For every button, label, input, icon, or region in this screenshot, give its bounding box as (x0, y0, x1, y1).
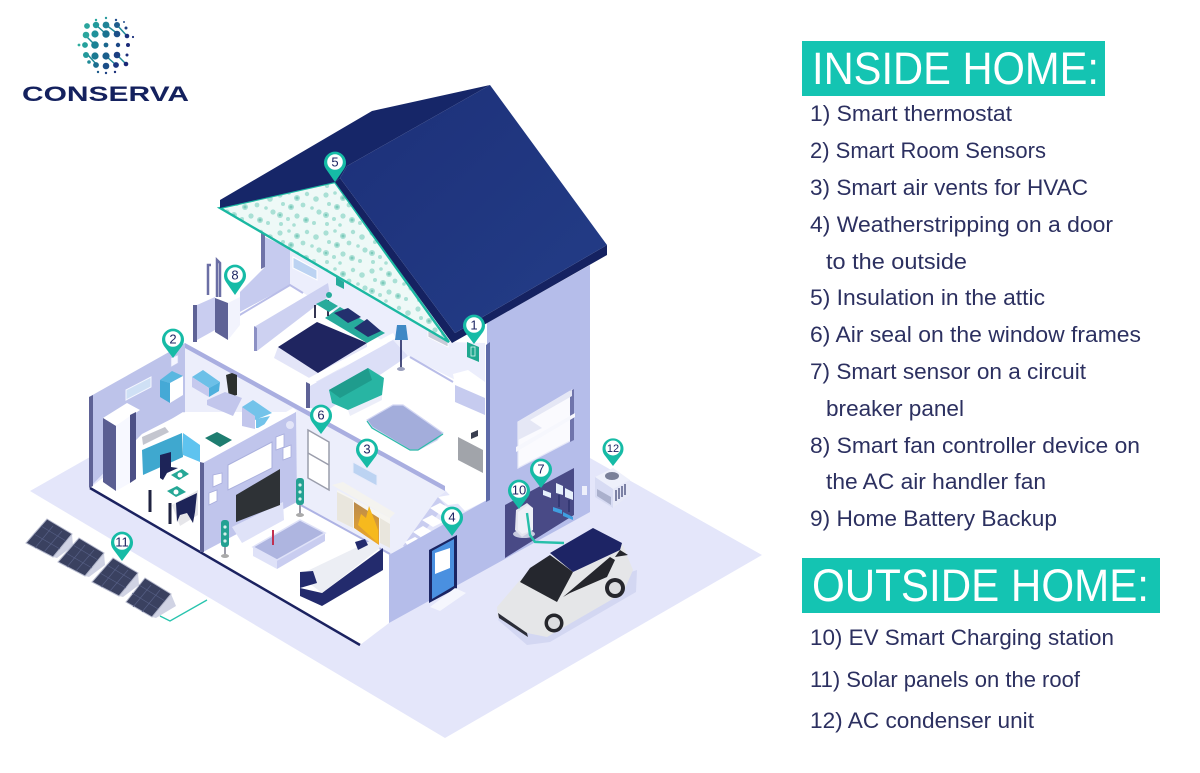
pin 2: 2 (169, 332, 177, 347)
chair front (176, 493, 197, 523)
lower back wall (185, 345, 445, 553)
bedroom front partition (305, 333, 408, 410)
air handler room (193, 260, 240, 342)
wall clock (286, 421, 294, 429)
pin 4 (441, 507, 463, 536)
item 8: the AC air handler fan (826, 469, 1046, 494)
roof (220, 85, 607, 343)
solar cable (160, 600, 207, 621)
logo: Conserva (22, 17, 189, 106)
speaker left (221, 520, 229, 558)
side cabinet (458, 428, 487, 473)
smart thermostat (467, 342, 479, 362)
coffee table (253, 520, 325, 569)
sink (142, 427, 169, 445)
blue box (242, 400, 272, 429)
air vent (353, 462, 377, 486)
pin 10: 10 (512, 483, 526, 498)
item 8 (810, 433, 1140, 494)
pin 3 (356, 439, 378, 468)
pin 1: 1 (470, 318, 478, 333)
stripe: lower back wall top (185, 343, 445, 491)
panel: outside home list (802, 558, 1160, 733)
item 7 (810, 359, 1086, 421)
breaker boxes (543, 483, 573, 520)
solar panel 2 (58, 538, 105, 577)
electric car (497, 528, 637, 645)
partition kitchen living (200, 408, 297, 552)
charging cable (527, 513, 564, 543)
TV wall (209, 421, 294, 543)
floor lamp (395, 325, 408, 371)
logo wordmark: CONSERVA (22, 83, 189, 106)
insulation triangle (220, 182, 449, 342)
pin 11 (111, 532, 133, 561)
television (236, 469, 280, 522)
pin 2 (162, 329, 184, 358)
panel: house (89, 85, 637, 645)
pin 5: 5 (331, 155, 339, 170)
item 4 (810, 212, 1113, 274)
tall speaker (226, 373, 237, 397)
solar panel 4 (126, 578, 176, 618)
item 9: 9) Home Battery Backup (810, 506, 1057, 531)
kitchen and living floor (90, 412, 390, 645)
upper back wall (290, 248, 485, 395)
ground plane (30, 457, 762, 738)
fireplace (332, 482, 395, 548)
kitchen (103, 355, 272, 526)
upper baseboards (228, 285, 453, 382)
window: exterior (516, 389, 575, 468)
smart room sensor (171, 355, 178, 367)
wall vent kitchen (126, 377, 151, 400)
upper window (293, 257, 317, 280)
icon: dotted globe (78, 17, 134, 74)
pin 5 (324, 152, 346, 182)
shelf unit (207, 392, 242, 416)
pin 7: 7 (537, 462, 545, 477)
rug (367, 405, 443, 450)
item 4: 4) Weatherstripping on a door (810, 212, 1113, 237)
fire (354, 502, 379, 545)
panel: solar array (26, 519, 207, 621)
item 3: 3) Smart air vents for HVAC (810, 175, 1088, 200)
dining table (148, 469, 200, 526)
item 11: 11) Solar panels on the roof (810, 667, 1081, 692)
cooktop (205, 432, 232, 447)
upper left wall (240, 237, 290, 312)
upper room partitions (254, 283, 330, 351)
pin 3: 3 (363, 442, 371, 457)
pin 6 (310, 405, 332, 434)
item 7: breaker panel (826, 396, 964, 421)
speaker right (296, 478, 304, 517)
upper floor (185, 285, 487, 511)
item 4: to the outside (826, 249, 967, 274)
counter top (142, 412, 235, 453)
TV stand (232, 502, 284, 543)
pin 8 (224, 265, 246, 295)
AC condenser (595, 468, 630, 508)
picture (228, 442, 272, 490)
chair back (160, 452, 178, 480)
wall frames (209, 434, 291, 505)
item 1: 1) Smart thermostat (810, 101, 1012, 126)
wall cabinet (160, 371, 183, 403)
cabinets (142, 433, 200, 475)
dresser (453, 370, 485, 415)
pin 4: 4 (448, 510, 456, 525)
duct pipes (208, 260, 220, 297)
item 10: 10) EV Smart Charging station (810, 625, 1114, 650)
item 8: 8) Smart fan controller device on (810, 433, 1140, 458)
door (429, 535, 466, 611)
pin 12: 12 (607, 443, 619, 455)
bed (274, 292, 385, 383)
front wall and right wall (389, 265, 590, 623)
wall socket (582, 486, 587, 495)
pin 8: 8 (231, 268, 239, 283)
solar panel 3 (92, 558, 139, 597)
item 5: 5) Insulation in the attic (810, 285, 1045, 310)
pin 12 (602, 438, 624, 466)
upper wall switch (336, 277, 344, 289)
pin 10 (508, 480, 530, 509)
item 7: 7) Smart sensor on a circuit (810, 359, 1086, 384)
panel: inside home list (802, 41, 1141, 531)
bedside chair (315, 292, 338, 318)
pin 1 (463, 315, 485, 344)
garage panel (505, 468, 574, 558)
window: living room (308, 430, 329, 490)
EV charger (513, 503, 564, 543)
green sofa (329, 368, 384, 416)
floor front edge (90, 488, 360, 645)
pin 11: 11 (115, 535, 129, 550)
item 12: 12) AC condenser unit (810, 708, 1034, 733)
item 2: 2) Smart Room Sensors (810, 138, 1046, 163)
pin 7 (530, 459, 552, 488)
fridge (103, 403, 140, 491)
pin 6: 6 (317, 408, 325, 423)
upper air vent (428, 328, 448, 347)
solar panel 1 (26, 519, 73, 558)
stairs (403, 495, 463, 550)
kitchen left wall (89, 343, 185, 484)
heading: outside home: OUTSIDE HOME: (812, 560, 1149, 611)
upper cabinet (192, 370, 220, 397)
heading: inside home: INSIDE HOME: (812, 43, 1099, 94)
sofa (300, 539, 383, 606)
item 6: 6) Air seal on the window frames (810, 322, 1141, 347)
